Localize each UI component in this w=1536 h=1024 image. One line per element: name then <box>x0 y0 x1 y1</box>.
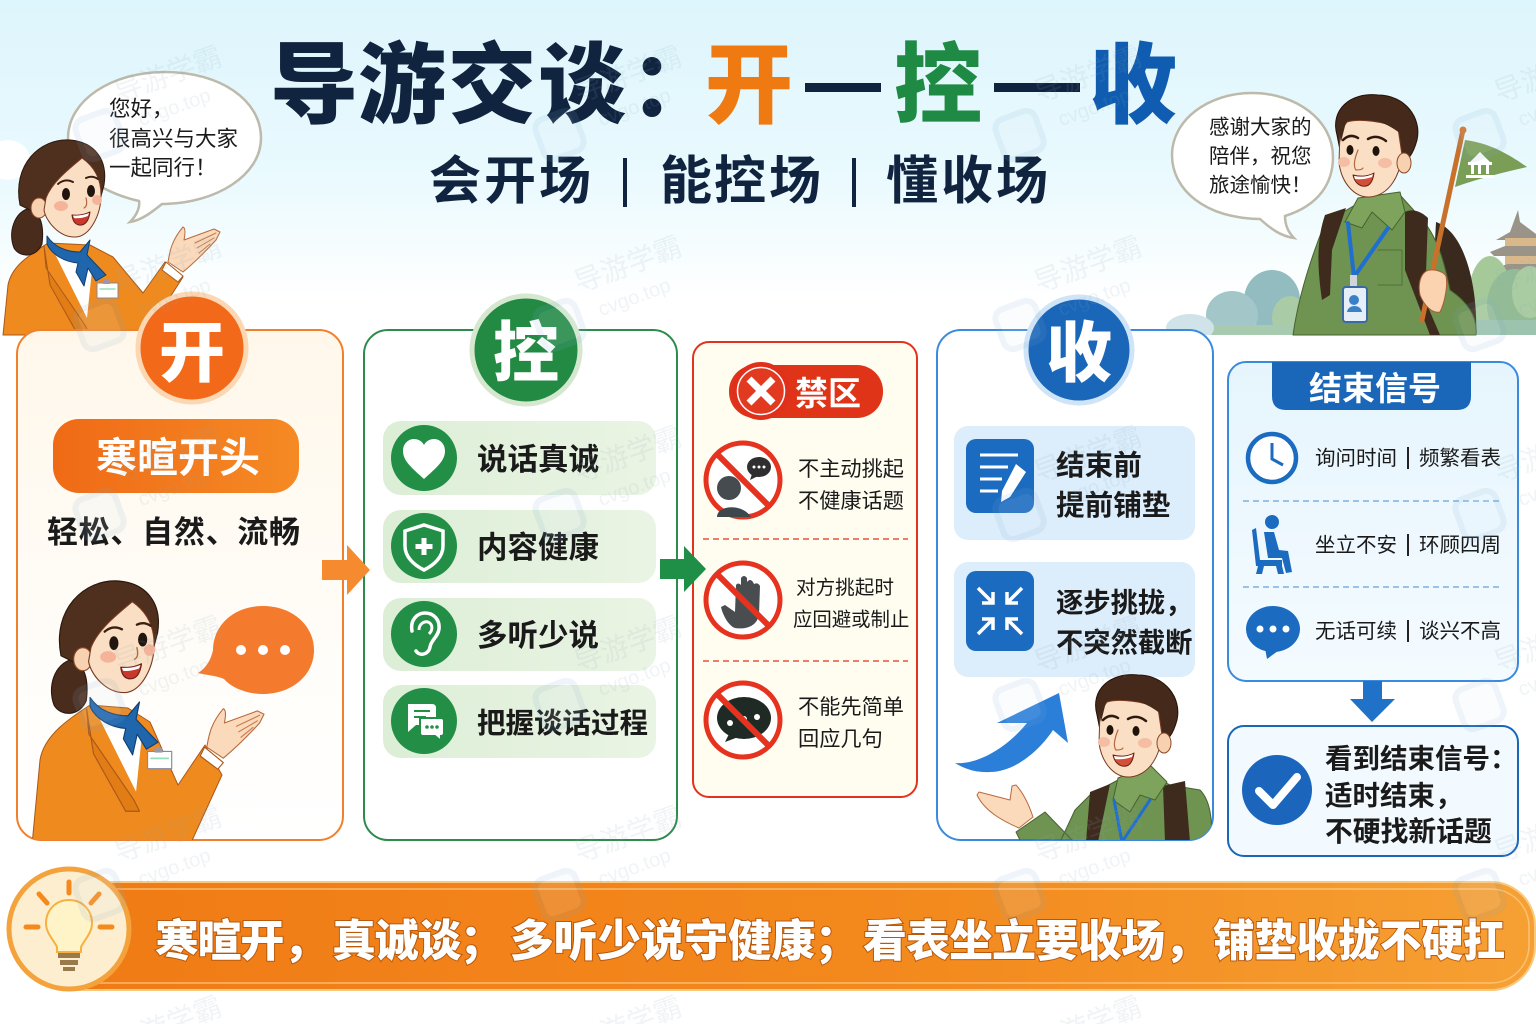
text: summary: 铺垫收拢不硬扛 <box>1213 917 1505 966</box>
header: 结束信号: 结束信号 <box>1309 370 1441 407</box>
row: nothing to say: 谈兴不高 <box>1419 620 1501 643</box>
row: 结束前提前铺垫: 提前铺垫 <box>1056 490 1171 522</box>
row: 逐步收拢: 逐步挑拢， <box>1056 587 1192 618</box>
row: 把握谈话过程 <box>383 685 656 758</box>
arrow: orange to next panel <box>322 545 370 595</box>
watermark overlay pattern: cvgo.top <box>135 844 214 891</box>
row: 内容健康 <box>383 510 656 583</box>
row: 逐步收拢 <box>954 562 1195 677</box>
watermark overlay pattern: cvgo.top <box>135 84 214 131</box>
watermark overlay pattern: 导游学霸 <box>570 421 686 488</box>
panel: 结束信号 end signals <box>1228 362 1518 681</box>
watermark overlay pattern: cvgo.top <box>595 274 674 321</box>
text: rule three: 不能先简单 <box>798 695 904 719</box>
text: summary: 看表坐立要收场， <box>863 916 1208 966</box>
arrow: green to forbidden zone <box>660 546 706 592</box>
speech bubble: male guide thanks: 感谢大家的 <box>1209 116 1312 139</box>
row: 结束前提前铺垫 <box>954 426 1195 540</box>
icon: no brief reply <box>706 683 780 757</box>
row: checks time: 询问时间 <box>1315 447 1397 470</box>
watermark overlay pattern: cvgo.top <box>1055 274 1134 321</box>
icon: check <box>1242 755 1312 825</box>
sky background <box>0 0 1536 300</box>
title: 控 <box>894 36 982 135</box>
speech bubble: female guide greeting: 一起同行！ <box>109 156 217 180</box>
watermark overlay pattern: cvgo.top <box>135 654 214 701</box>
panel: 禁区 forbidden zone <box>693 342 917 797</box>
row: 说话真诚 <box>383 421 656 495</box>
text: rule three <box>798 695 904 751</box>
watermark overlay pattern: 导游学霸 <box>570 611 686 678</box>
text: summary: 多听少说守健康； <box>510 917 859 966</box>
text: summary: 寒暄开， <box>155 916 327 966</box>
speech bubble: female guide greeting <box>68 72 261 222</box>
text: conclusion: 适时结束， <box>1325 780 1462 811</box>
watermark overlay pattern: cvgo.top <box>1055 844 1134 891</box>
watermark overlay pattern: cvgo.top <box>135 464 214 511</box>
heading pill: 寒暄开头: 寒暄开头 <box>96 435 260 481</box>
text: rule two <box>793 577 909 631</box>
figure: male guide gesturing <box>977 675 1212 842</box>
header: 结束信号 <box>1272 362 1471 410</box>
row: nothing to say <box>1246 606 1501 659</box>
text: rule one: 不健康话题 <box>798 489 904 513</box>
badge: 控: 控 <box>493 316 559 390</box>
speech bubble: female guide greeting: 很高兴与大家 <box>109 127 238 151</box>
watermark overlay pattern: 导游学霸 <box>1030 611 1146 678</box>
watermark overlay pattern: 导游学霸 <box>110 801 226 868</box>
subtitle <box>429 153 1048 211</box>
arrow: curved blue up <box>955 693 1068 772</box>
title: 收 <box>1089 36 1177 135</box>
badge: 开 <box>138 294 246 402</box>
row: 说话真诚: 说话真诚 <box>477 443 599 477</box>
banner: summary <box>9 869 1535 990</box>
title: 导游交谈： <box>270 36 718 135</box>
row: 把握谈话过程: 把握谈话过程 <box>477 708 648 740</box>
watermark overlay pattern: cvgo.top <box>595 464 674 511</box>
row: checks time: 频繁看表 <box>1419 447 1501 470</box>
subtitle: 会开场 <box>429 153 591 211</box>
text: conclusion: 不硬找新话题 <box>1325 816 1492 847</box>
panel: 开 opening <box>17 294 343 845</box>
figure: male guide with flag <box>1293 95 1527 335</box>
badge: 收: 收 <box>1046 316 1112 390</box>
row: fidgeting <box>1252 515 1501 574</box>
row: fidgeting: 环顾四周 <box>1419 534 1501 557</box>
divider dashed <box>703 538 908 540</box>
watermark overlay pattern: 导游学霸 <box>1030 41 1146 108</box>
row: fidgeting: 坐立不安 <box>1315 534 1397 557</box>
divider dashed <box>703 660 908 662</box>
watermark overlay pattern: cvgo.top <box>135 274 214 321</box>
text: rule two: 对方挑起时 <box>796 577 894 599</box>
watermark overlay pattern: 导游学霸 <box>570 41 686 108</box>
figure: female guide explaining <box>32 581 264 845</box>
watermark overlay pattern: 导游学霸 <box>110 421 226 488</box>
watermark overlay pattern: cvgo.top <box>595 844 674 891</box>
watermark overlay pattern: 导游学霸 <box>570 801 686 868</box>
icon: no unhealthy topics <box>706 443 780 517</box>
watermark overlay pattern: cvgo.top <box>1055 84 1134 131</box>
icon: light bulb <box>9 869 129 989</box>
text: summary: 真诚谈； <box>332 917 504 966</box>
watermark overlay pattern: cvgo.top <box>1055 654 1134 701</box>
text: conclusion: 看到结束信号： <box>1325 743 1518 774</box>
panel: 收 closing <box>937 297 1213 842</box>
text: relaxed natural smooth: 轻松、自然、流畅 <box>47 515 300 550</box>
text: rule one: 不主动挑起 <box>798 457 904 481</box>
watermark overlay pattern: 导游学霸 <box>110 41 226 108</box>
scenery: trees and pagoda <box>1166 210 1536 344</box>
figure: female guide greeting <box>3 140 220 335</box>
watermark overlay pattern: 导游学霸 <box>570 231 686 298</box>
text: conclusion <box>1325 743 1518 847</box>
watermark overlay pattern: 导游学霸 <box>1030 421 1146 488</box>
text: rule two: 应回避或制止 <box>793 609 909 631</box>
watermark overlay pattern: 导游学霸 <box>1030 801 1146 868</box>
title <box>270 36 1177 135</box>
row: 多听少说: 多听少说 <box>477 619 599 653</box>
watermark overlay pattern: 导游学霸 <box>110 611 226 678</box>
subtitle: 能控场 <box>660 153 821 211</box>
speech bubble: male guide thanks: 旅途愉快！ <box>1209 174 1312 197</box>
text: summary <box>155 916 1505 966</box>
panel: conclusion <box>1228 726 1518 856</box>
badge: 开: 开 <box>159 316 225 390</box>
speech bubble: male guide thanks <box>1172 93 1333 238</box>
row: 结束前提前铺垫: 结束前 <box>1056 450 1142 482</box>
watermark overlay pattern: 导游学霸 <box>110 231 226 298</box>
title: 开 <box>705 36 793 135</box>
text: rule one <box>798 457 904 513</box>
row: 多听少说 <box>383 598 656 671</box>
watermark overlay pattern: cvgo.top <box>1055 464 1134 511</box>
pill: 禁区: 禁区 <box>795 375 861 412</box>
badge: 收 <box>1026 297 1132 403</box>
icon: orange chat bubble <box>198 606 314 694</box>
badge: 控 <box>472 296 580 404</box>
watermark overlay pattern: cvgo.top <box>595 84 674 131</box>
speech bubble: female guide greeting: 您好， <box>109 97 174 121</box>
row: nothing to say: 无话可续 <box>1315 620 1397 643</box>
icon: stop hand <box>706 563 780 637</box>
row: 逐步收拢: 不突然截断 <box>1056 627 1192 658</box>
speech bubble: male guide thanks: 陪伴，祝您 <box>1209 145 1312 168</box>
watermark overlay pattern: cvgo.top <box>595 654 674 701</box>
pill: 禁区 <box>729 362 883 420</box>
panel: 控 control <box>364 296 677 840</box>
arrow: blue down <box>1350 681 1395 722</box>
heading pill: 寒暄开头 <box>53 419 299 493</box>
text: rule three: 回应几句 <box>798 727 883 751</box>
subtitle: 懂收场 <box>886 153 1048 211</box>
row: checks time <box>1248 434 1501 482</box>
row: 内容健康: 内容健康 <box>477 531 599 565</box>
watermark overlay pattern: 导游学霸 <box>1030 231 1146 298</box>
